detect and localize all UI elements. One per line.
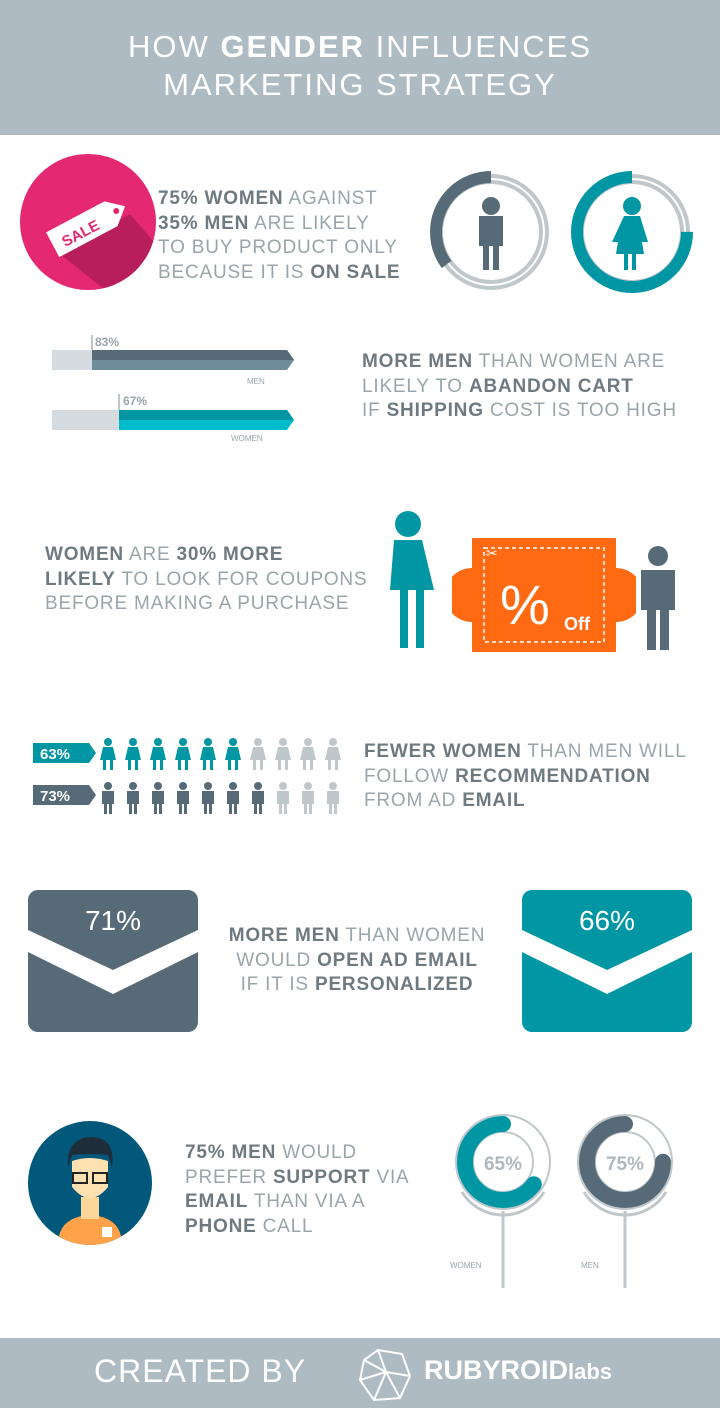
text: personalized stat: MORE MEN THAN WOMEN — [229, 925, 485, 946]
text: recommendation stat: FROM AD EMAIL — [364, 790, 525, 811]
text: cart stat — [362, 351, 677, 421]
footer text: logo name: RUBYROIDlabs — [424, 1355, 612, 1385]
text: personalized stat — [229, 925, 485, 995]
icon: envelope men 71% — [28, 890, 198, 1032]
donut: men 75%: MEN — [581, 1261, 599, 1270]
icon: envelope women 66%: 66% — [579, 905, 635, 936]
text: recommendation stat — [364, 741, 687, 811]
icon: woman figure — [390, 511, 434, 648]
header — [0, 0, 720, 135]
ring: men 35% — [430, 171, 549, 290]
text: personalized stat: WOULD OPEN AD EMAIL — [236, 950, 478, 970]
text: support stat: EMAIL THAN VIA A — [185, 1191, 365, 1212]
donut: women 65% — [450, 1114, 551, 1288]
text: sale stat: 35% MEN ARE LIKELY — [158, 212, 370, 234]
text: cart stat: MORE MEN THAN WOMEN ARE — [362, 351, 665, 372]
bar chart: cart abandonment: 83% — [95, 335, 119, 349]
icon: rubyroid logo — [359, 1349, 411, 1401]
text: sale stat: 75% WOMEN AGAINST — [158, 188, 378, 209]
icon: support avatar — [28, 1121, 152, 1245]
text: support stat: 75% MEN WOULD — [185, 1142, 357, 1163]
icon: sale tag: SALE — [59, 217, 102, 251]
text: support stat: PREFER SUPPORT VIA — [185, 1166, 410, 1188]
bar chart: cart abandonment — [52, 335, 294, 442]
text: cart stat: IF SHIPPING COST IS TOO HIGH — [362, 400, 677, 421]
bar chart: cart abandonment: 67% — [123, 394, 147, 408]
text: coupons stat — [45, 544, 367, 614]
icon: coupon — [452, 538, 636, 652]
text: coupons stat: LIKELY TO LOOK FOR COUPONS — [45, 568, 367, 590]
title: MARKETING STRATEGY — [163, 67, 557, 102]
text: sale stat: TO BUY PRODUCT ONLY — [158, 237, 398, 258]
icon: coupon: % — [500, 573, 550, 636]
footer text: created by: CREATED BY — [94, 1353, 306, 1389]
text: support stat — [185, 1142, 410, 1236]
icon: sale tag — [20, 154, 156, 290]
icon: coupon: Off — [564, 614, 591, 634]
text: sale stat: BECAUSE IT IS ON SALE — [158, 262, 400, 282]
ring: women 75% — [571, 171, 693, 293]
donut: women 65%: 65% — [484, 1154, 522, 1175]
text: sale stat — [158, 188, 400, 282]
icon: man figure — [641, 546, 675, 650]
text: coupons stat: WOMEN ARE 30% MORE — [45, 544, 283, 565]
donut: men 75% — [577, 1114, 673, 1288]
pictogram rows: ad email: 63% — [40, 746, 70, 763]
text: coupons stat: BEFORE MAKING A PURCHASE — [45, 593, 349, 614]
title: HOW GENDER INFLUENCES — [128, 29, 592, 64]
bar chart: cart abandonment: MEN — [247, 377, 265, 386]
text: support stat: PHONE CALL — [185, 1216, 313, 1236]
text: cart stat: LIKELY TO ABANDON CART — [362, 376, 634, 396]
footer — [0, 1338, 720, 1408]
donut: men 75%: 75% — [606, 1154, 644, 1175]
pictogram rows: ad email: 73% — [40, 788, 70, 805]
icon: coupon: ✂ — [486, 545, 498, 561]
text: recommendation stat: FOLLOW RECOMMENDATION — [364, 766, 651, 786]
text: recommendation stat: FEWER WOMEN THAN MEN WILL — [364, 741, 687, 762]
donut: women 65%: WOMEN — [450, 1261, 482, 1270]
icon: envelope men 71%: 71% — [85, 905, 141, 936]
pictogram rows: ad email — [33, 738, 341, 814]
text: personalized stat: IF IT IS PERSONALIZED — [241, 974, 473, 995]
title — [128, 29, 592, 102]
icon: envelope women 66% — [522, 890, 692, 1032]
